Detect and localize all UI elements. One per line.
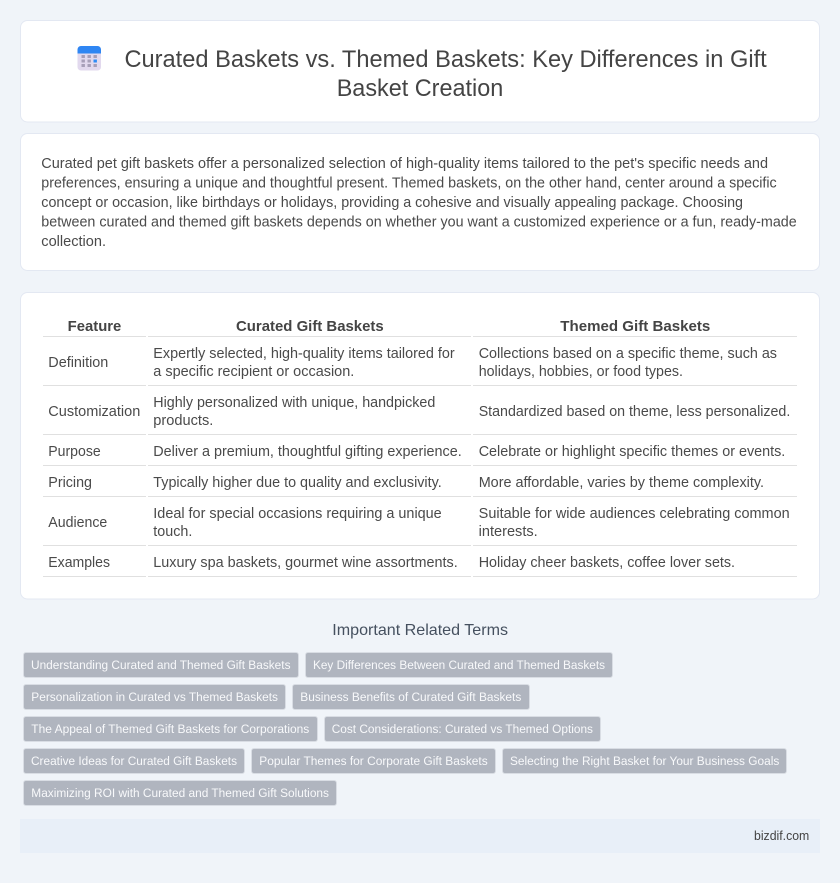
row: audience: interests. [479, 524, 538, 540]
tag [24, 652, 298, 678]
tag: Maximizing ROI with Curated and Themed Gift Solutions [31, 786, 329, 800]
text block: introduction: concept or occasion, like birthdays or holidays, providing a cohesive and visually appealing package. Choosing [41, 195, 743, 211]
tag [292, 684, 530, 710]
table header row: Curated Gift Baskets [236, 319, 384, 335]
text block: introduction: preferences, ensuring a unique and thoughtful present. Themed baskets, on the other hand, center around a specific [41, 176, 777, 192]
text block: introduction [41, 156, 797, 250]
tag: Creative Ideas for Curated Gift Baskets [31, 754, 237, 768]
footer: bizdif.com [754, 829, 809, 843]
tag: Key Differences Between Curated and Themed Baskets [313, 658, 605, 672]
row: examples: Holiday cheer baskets, coffee lover sets. [479, 555, 735, 571]
tag: Business Benefits of Curated Gift Baskets [300, 690, 521, 704]
row: definition: Collections based on a specific theme, such as [479, 346, 777, 362]
footer [20, 819, 820, 853]
row: examples: Examples [48, 555, 110, 571]
row: pricing [48, 475, 764, 491]
row: customization [48, 395, 790, 429]
tag: Understanding Curated and Themed Gift Baskets [31, 658, 290, 672]
row: customization: Standardized based on theme, less personalized. [479, 404, 790, 420]
tag [324, 716, 600, 742]
row: customization: Customization [48, 404, 140, 420]
icon: calendar [78, 46, 101, 70]
tag: The Appeal of Themed Gift Baskets for Corporations [31, 722, 309, 736]
row: audience: touch. [153, 524, 192, 540]
tag [252, 748, 496, 774]
panel: comparison table [20, 292, 820, 599]
tag: Selecting the Right Basket for Your Business Goals [510, 754, 779, 768]
tag: Popular Themes for Corporate Gift Baskets [259, 754, 488, 768]
row: examples [48, 555, 735, 571]
tag [24, 780, 336, 806]
heading: important related terms: Important Related Terms [332, 622, 508, 639]
row: definition: Expertly selected, high-quality items tailored for [153, 346, 455, 362]
row: audience: Suitable for wide audiences celebrating common [479, 506, 790, 522]
title [124, 46, 767, 102]
tag: Cost Considerations: Curated vs Themed Options [332, 722, 593, 736]
row: audience [48, 506, 790, 540]
table header row: Feature [68, 319, 121, 335]
title: Curated Baskets vs. Themed Baskets: Key Differences in Gift [124, 46, 767, 73]
title: Basket Creation [337, 75, 503, 102]
tag: Personalization in Curated vs Themed Baskets [31, 690, 278, 704]
text block: introduction: between curated and themed gift baskets depends on whether you want a customized experience or a fun, ready-made [41, 214, 797, 230]
row: definition: a specific recipient or occasion. [153, 364, 354, 380]
row: audience: Ideal for special occasions requiring a unique [153, 506, 442, 522]
panel: introduction paragraph [20, 134, 820, 270]
text block: introduction: collection. [41, 234, 106, 250]
row: purpose: Celebrate or highlight specific themes or events. [479, 444, 785, 460]
tag [24, 716, 318, 742]
row: examples: Luxury spa baskets, gourmet wine assortments. [153, 555, 458, 571]
table header row [68, 319, 710, 335]
row: customization: Highly personalized with unique, handpicked [153, 395, 435, 411]
header panel [20, 20, 820, 122]
tag [24, 684, 286, 710]
row: pricing: More affordable, varies by theme complexity. [479, 475, 764, 491]
row: customization: products. [153, 413, 213, 429]
row: audience: Audience [48, 515, 107, 531]
row: definition: Definition [48, 355, 108, 371]
row: definition: holidays, hobbies, or food types. [479, 364, 683, 380]
row: purpose: Purpose [48, 444, 101, 460]
row: pricing: Pricing [48, 475, 92, 491]
row: purpose [48, 444, 785, 460]
table header row: Themed Gift Baskets [560, 319, 710, 335]
row: definition [48, 346, 777, 380]
text block: introduction: Curated pet gift baskets offer a personalized selection of high-quality items tailored to the pet's specific needs and [41, 156, 768, 172]
tag [24, 748, 244, 774]
tag [306, 652, 612, 678]
row: purpose: Deliver a premium, thoughtful gifting experience. [153, 444, 462, 460]
tag [502, 748, 786, 774]
tag list: related terms [24, 652, 786, 806]
row: pricing: Typically higher due to quality and exclusivity. [153, 475, 442, 491]
